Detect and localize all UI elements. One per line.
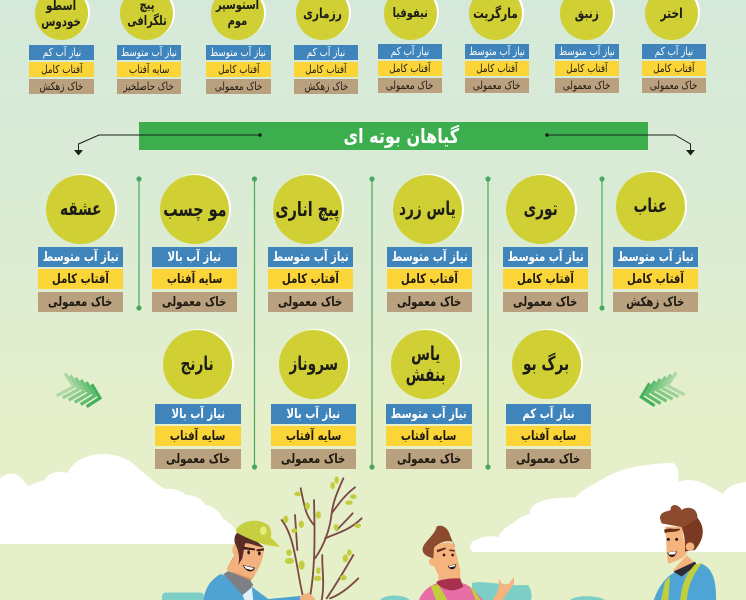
circle name bbox=[279, 330, 348, 399]
card: نارنج bbox=[155, 329, 241, 469]
soil type bbox=[386, 449, 472, 469]
water need bbox=[29, 45, 94, 60]
card: پیچ اناری bbox=[268, 174, 353, 312]
soil type: خاک معمولی bbox=[281, 452, 346, 466]
card: اسطو خودوس bbox=[29, 0, 94, 94]
section banner: گیاهان بوته ای bbox=[344, 124, 459, 148]
person in pink shirt bbox=[418, 526, 514, 600]
water need: نیاز آب بالا bbox=[171, 406, 225, 422]
vertical dividers bbox=[137, 177, 604, 469]
sunlight need bbox=[206, 62, 271, 77]
sunlight need: آفتاب کامل bbox=[566, 62, 608, 75]
soil type bbox=[642, 78, 706, 93]
water need: نیاز آب بالا bbox=[287, 406, 340, 422]
sunlight need bbox=[555, 61, 619, 76]
card: زنبق bbox=[555, 0, 619, 93]
circle name: زنبق bbox=[574, 6, 599, 22]
soil type: خاک حاصلخیز bbox=[124, 80, 174, 93]
sunlight need bbox=[155, 426, 241, 446]
circle name: تلگرافی bbox=[127, 14, 166, 28]
circle name bbox=[120, 0, 173, 40]
soil type: خاک زهکش bbox=[626, 294, 685, 310]
person in blue shirt bbox=[653, 505, 716, 600]
sunlight need: آفتاب کامل bbox=[52, 272, 109, 286]
circle name bbox=[469, 0, 522, 40]
water need: نیاز آب کم bbox=[522, 406, 575, 422]
sunlight need: سایه آفتاب bbox=[129, 63, 169, 76]
person with hard hat bbox=[203, 521, 315, 600]
card: نیفوفیا bbox=[378, 0, 442, 93]
sunlight need bbox=[294, 62, 358, 77]
circle name bbox=[512, 330, 581, 399]
card: مارگریت bbox=[465, 0, 529, 93]
sunlight need: آفتاب کامل bbox=[41, 63, 82, 76]
sunlight need bbox=[152, 269, 237, 289]
card: برگ بو bbox=[506, 329, 591, 469]
sunlight need bbox=[642, 61, 706, 76]
sunlight need: آفتاب کامل bbox=[282, 272, 339, 286]
circle name bbox=[296, 0, 349, 40]
circle name: خودوس bbox=[42, 14, 81, 30]
circle name: نارنج bbox=[181, 353, 214, 375]
card: عشقه bbox=[38, 174, 123, 312]
sunlight need: آفتاب کامل bbox=[305, 63, 347, 76]
water need: نیاز آب کم bbox=[307, 46, 345, 59]
water need bbox=[387, 247, 472, 267]
soil type: خاک معمولی bbox=[513, 294, 578, 310]
sunlight need: آفتاب کامل bbox=[653, 62, 695, 75]
sunlight need: سایه آفتاب bbox=[167, 272, 222, 286]
sunlight need: سایه آفتاب bbox=[286, 428, 341, 444]
water need bbox=[386, 404, 472, 424]
water need bbox=[294, 45, 358, 60]
soil type bbox=[555, 78, 619, 93]
water need: نیاز آب کم bbox=[391, 45, 429, 58]
soil type: خاک معمولی bbox=[386, 79, 434, 92]
sunlight need bbox=[117, 62, 181, 77]
water need: نیاز آب متوسط bbox=[121, 46, 177, 59]
water need bbox=[378, 44, 442, 59]
sunlight need: سایه آفتاب bbox=[521, 428, 576, 444]
sunlight need: سایه آفتاب bbox=[170, 428, 226, 444]
circle name: برگ بو bbox=[523, 353, 570, 375]
cloud right bbox=[470, 463, 746, 552]
card: عناب bbox=[613, 171, 698, 312]
soil type bbox=[29, 79, 94, 94]
circle name bbox=[391, 330, 460, 399]
soil type: خاک معمولی bbox=[162, 294, 227, 310]
water need: نیاز آب متوسط bbox=[273, 250, 348, 264]
chevrons right bbox=[641, 372, 685, 406]
water need: نیاز آب متوسط bbox=[391, 406, 467, 422]
card: یاس بنفش bbox=[386, 329, 472, 469]
circle name: رزماری bbox=[303, 6, 342, 22]
circle name bbox=[46, 175, 115, 244]
sunlight need bbox=[268, 269, 353, 289]
circle name bbox=[645, 0, 698, 40]
water need: نیاز آب متوسط bbox=[559, 45, 615, 58]
circle name bbox=[163, 330, 232, 399]
card: اختر bbox=[642, 0, 706, 93]
water need: نیاز آب متوسط bbox=[469, 45, 525, 58]
soil type: خاک معمولی bbox=[516, 452, 581, 466]
soil type: خاک معمولی bbox=[650, 79, 698, 92]
soil type bbox=[271, 449, 356, 469]
water need bbox=[613, 247, 698, 267]
soil type: خاک معمولی bbox=[397, 294, 462, 310]
card: یاس زرد bbox=[387, 174, 472, 312]
sapling bbox=[282, 476, 362, 600]
water need: نیاز آب بالا bbox=[168, 250, 221, 264]
sunlight need: سایه آفتاب bbox=[401, 428, 457, 444]
circle name: پیچ اناری bbox=[276, 197, 339, 221]
water need bbox=[503, 247, 588, 267]
sunlight need: آفتاب کامل bbox=[627, 272, 684, 286]
sunlight need: آفتاب کامل bbox=[401, 272, 458, 286]
card: رزماری bbox=[294, 0, 358, 94]
sunlight need bbox=[378, 61, 442, 76]
soil type: خاک معمولی bbox=[397, 452, 461, 466]
soil type bbox=[506, 449, 591, 469]
teal bushes small bbox=[380, 596, 605, 600]
card: توری bbox=[503, 174, 588, 312]
soil type bbox=[38, 292, 123, 312]
circle name bbox=[393, 175, 462, 244]
sunlight need bbox=[613, 269, 698, 289]
water need bbox=[152, 247, 237, 267]
card: موچسب bbox=[152, 174, 237, 312]
circle name bbox=[616, 172, 685, 241]
soil type: خاک معمولی bbox=[563, 79, 611, 92]
cloud left bbox=[0, 454, 237, 544]
soil type: خاک زهکش bbox=[304, 80, 348, 93]
circle name bbox=[35, 0, 88, 40]
water need: نیاز آب متوسط bbox=[618, 250, 693, 264]
soil type: خاک معمولی bbox=[48, 294, 113, 310]
sunlight need bbox=[271, 426, 356, 446]
water need: نیاز آب متوسط bbox=[210, 46, 266, 59]
card: پیچ تلگرافی bbox=[117, 0, 181, 94]
circle name bbox=[560, 0, 613, 40]
soil type bbox=[117, 79, 181, 94]
water need bbox=[155, 404, 241, 424]
soil type: خاک معمولی bbox=[278, 294, 343, 310]
soil type bbox=[268, 292, 353, 312]
card: سروناز bbox=[271, 329, 356, 469]
circle name: موم bbox=[228, 14, 247, 28]
teal bush left bbox=[162, 592, 204, 600]
circle name bbox=[273, 175, 342, 244]
water need: نیاز آب متوسط bbox=[43, 250, 118, 264]
circle name: عشقه bbox=[60, 198, 101, 220]
sunlight need bbox=[503, 269, 588, 289]
sunlight need: آفتاب کامل bbox=[476, 62, 518, 75]
sunlight need bbox=[387, 269, 472, 289]
sunlight need bbox=[29, 62, 94, 77]
water need bbox=[38, 247, 123, 267]
circle name: بنفش bbox=[406, 364, 445, 386]
water need bbox=[268, 247, 353, 267]
soil type: خاک معمولی bbox=[473, 79, 521, 92]
soil type bbox=[152, 292, 237, 312]
circle name bbox=[506, 175, 575, 244]
soil type: خاک معمولی bbox=[166, 452, 230, 466]
water need bbox=[271, 404, 356, 424]
soil type bbox=[613, 292, 698, 312]
circle name: اختر bbox=[660, 6, 683, 22]
circle name: مارگریت bbox=[473, 6, 518, 22]
water need bbox=[642, 44, 706, 59]
sunlight need: آفتاب کامل bbox=[218, 63, 259, 76]
teal bush behind middle person bbox=[472, 582, 532, 600]
water need bbox=[506, 404, 591, 424]
soil type bbox=[294, 79, 358, 94]
soil type bbox=[387, 292, 472, 312]
soil type bbox=[155, 449, 241, 469]
circle name: نیفوفیا bbox=[393, 6, 428, 20]
soil type bbox=[465, 78, 529, 93]
soil type bbox=[503, 292, 588, 312]
soil type bbox=[206, 79, 271, 94]
water need: نیاز آب متوسط bbox=[508, 250, 583, 264]
circle name: سروناز bbox=[289, 353, 338, 375]
card: استوسپر موم bbox=[206, 0, 271, 94]
circle name: یاس زرد bbox=[399, 198, 456, 220]
sunlight need: آفتاب کامل bbox=[389, 62, 431, 75]
circle name bbox=[211, 0, 264, 40]
soil type: خاک زهکش bbox=[40, 80, 83, 93]
circle name: مو چسب bbox=[163, 197, 226, 221]
soil type: خاک معمولی bbox=[215, 80, 262, 93]
arrows from banner bbox=[74, 133, 695, 156]
water need: نیاز آب کم bbox=[655, 45, 693, 58]
circle name: یاس bbox=[411, 342, 440, 364]
circle name: عناب bbox=[634, 195, 667, 217]
water need: نیاز آب کم bbox=[42, 46, 81, 59]
sunlight need bbox=[386, 426, 472, 446]
water need: نیاز آب متوسط bbox=[392, 250, 467, 264]
soil type bbox=[378, 78, 442, 93]
section banner bbox=[139, 122, 648, 150]
chevrons left bbox=[57, 373, 100, 407]
circle name: توری bbox=[523, 198, 558, 220]
circle name bbox=[384, 0, 437, 40]
circle name bbox=[160, 175, 229, 244]
sunlight need bbox=[506, 426, 591, 446]
sunlight need: آفتاب کامل bbox=[517, 272, 574, 286]
sunlight need bbox=[38, 269, 123, 289]
sunlight need bbox=[465, 61, 529, 76]
